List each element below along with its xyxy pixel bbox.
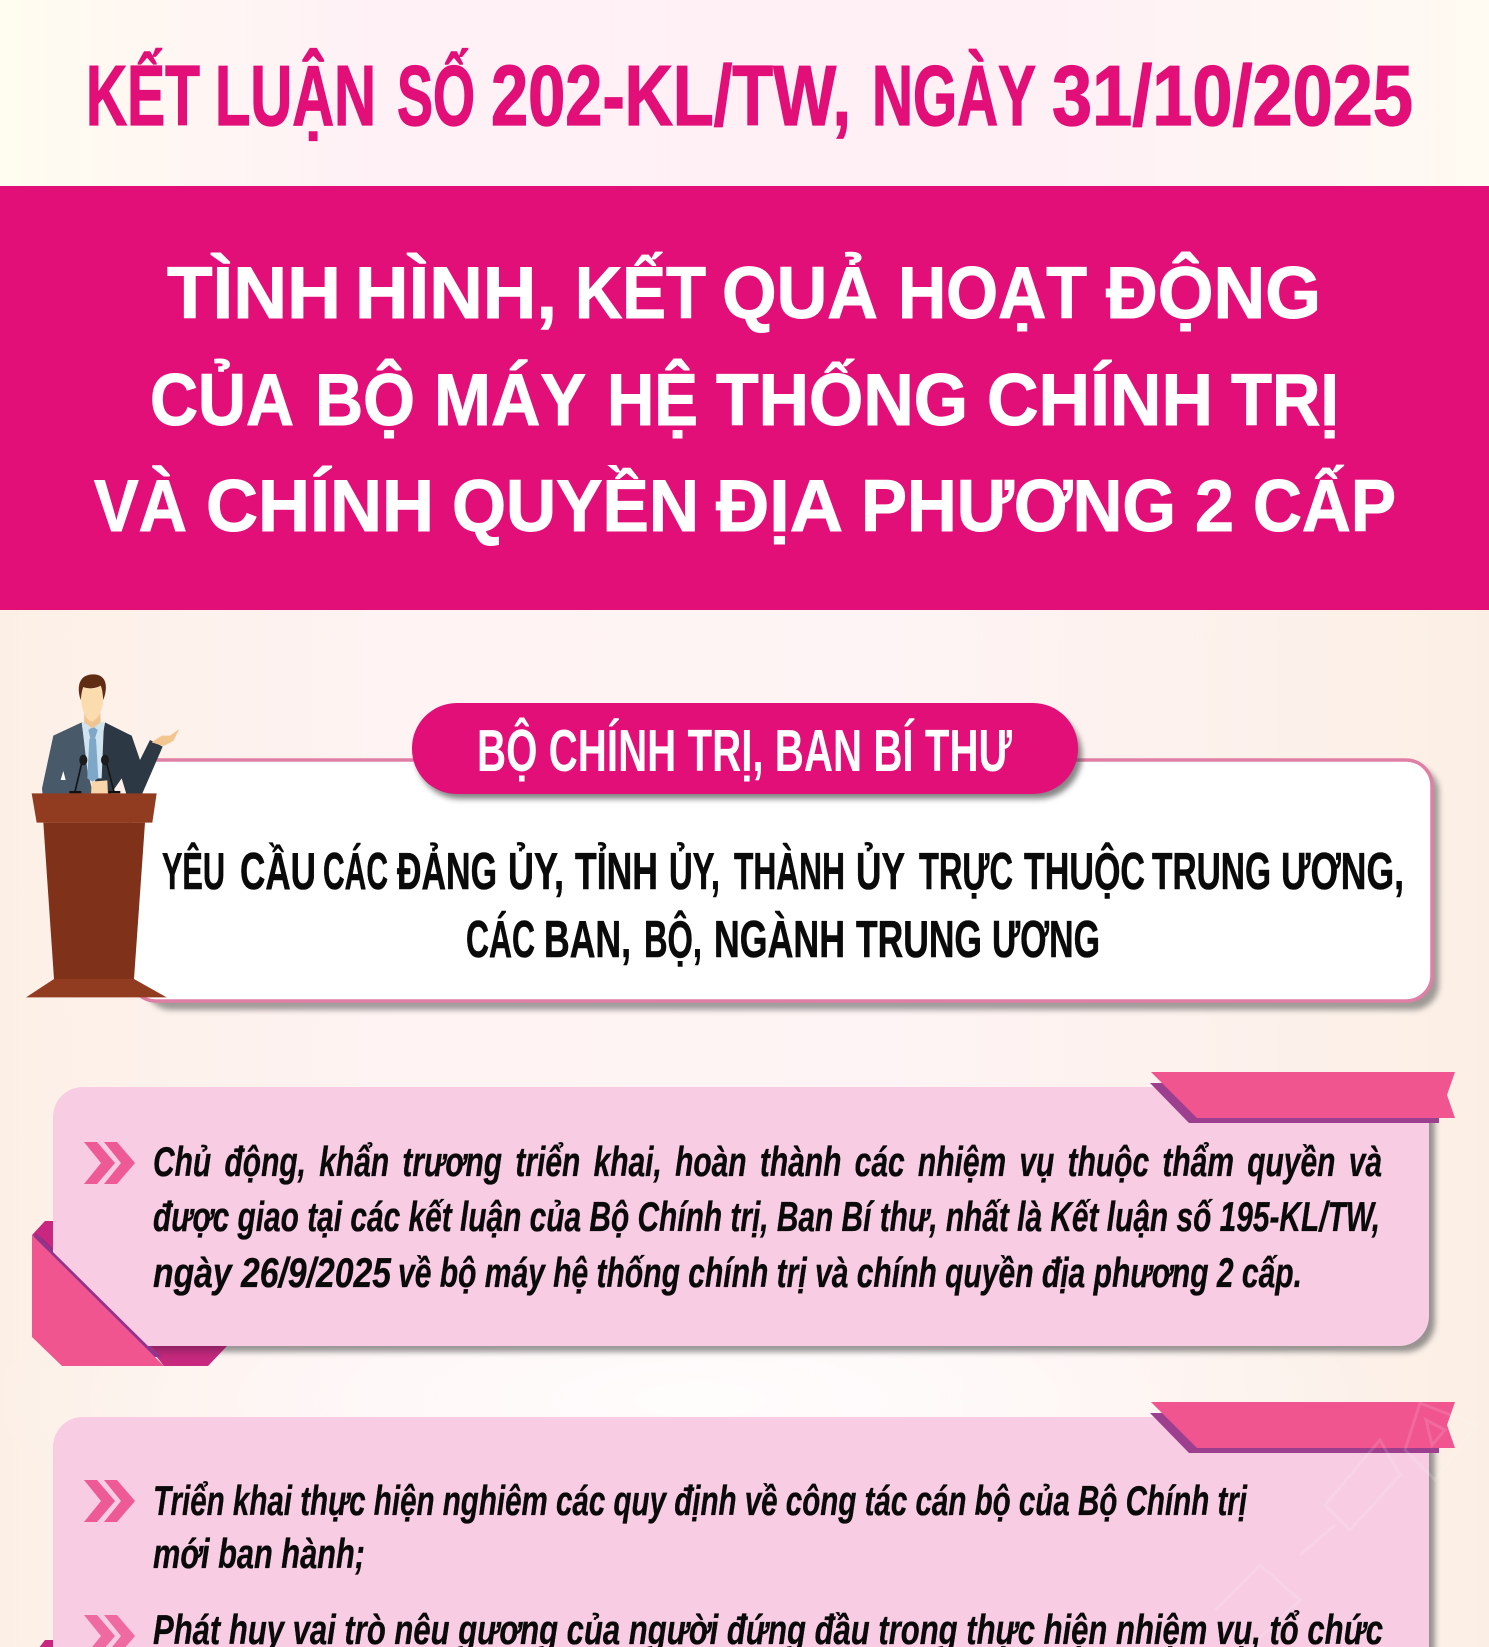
- title: [86, 48, 1413, 144]
- card 2 text: [153, 1477, 1383, 1647]
- banner heading text: HỆ: [607, 360, 698, 441]
- banner heading text: MÁY: [434, 360, 586, 441]
- panel: card 1: [32, 1072, 1455, 1366]
- box text: CẦU: [240, 842, 316, 901]
- title: KẾT: [86, 48, 200, 144]
- title: LUẬN: [215, 48, 376, 144]
- banner heading text: HOẠT: [898, 253, 1087, 334]
- box text: TỈNH: [575, 842, 658, 901]
- banner heading text: VÀ: [94, 466, 187, 547]
- banner heading text: ĐỊA: [716, 466, 843, 547]
- box text: ỦY,: [669, 842, 720, 901]
- card 2 text: mới ban hành;: [153, 1530, 365, 1577]
- box text: CÁC: [466, 911, 535, 969]
- card 1 text: ngày 26/9/2025: [153, 1249, 392, 1296]
- box text: THUỘC: [1024, 842, 1145, 901]
- banner heading text: QUẢ: [722, 253, 878, 334]
- ribbon: right: [1150, 1402, 1455, 1453]
- title: NGÀY: [872, 49, 1036, 144]
- icon: double chevron: [84, 1142, 135, 1184]
- icon: speaker at podium: [26, 674, 179, 997]
- banner heading text: CẤP: [1253, 466, 1396, 547]
- panel: requesting bodies box: [130, 760, 1439, 1010]
- banner heading text: CHÍNH: [206, 466, 434, 547]
- banner heading text: TÌNH: [167, 253, 341, 334]
- banner heading text: [94, 253, 1396, 547]
- box text: BAN,: [544, 911, 631, 969]
- banner heading text: BỘ: [315, 360, 415, 441]
- box text: ƯƠNG: [992, 911, 1100, 969]
- box text: NGÀNH: [714, 911, 845, 969]
- title: SỐ: [397, 48, 475, 144]
- banner heading text: PHƯƠNG: [861, 466, 1176, 547]
- panel: heading banner: [0, 186, 1489, 610]
- title: 31/10/2025: [1052, 49, 1413, 144]
- ribbon: right: [1150, 1072, 1455, 1123]
- ribbon: left fold: [32, 1221, 227, 1366]
- banner heading text: 2: [1195, 466, 1234, 547]
- panel: card 2: [32, 1402, 1476, 1647]
- box text: TRUNG: [856, 911, 982, 969]
- box text: CÁC: [323, 843, 388, 901]
- box text: TRUNG: [1152, 843, 1271, 901]
- box text: BỘ,: [644, 910, 702, 969]
- banner heading text: CỦA: [150, 360, 294, 441]
- box text: THÀNH: [734, 843, 845, 901]
- box text: YÊU: [162, 842, 225, 901]
- box text: ĐẢNG: [397, 842, 497, 901]
- banner heading text: CHÍNH: [987, 360, 1213, 441]
- heading pill: BỘ CHÍNH TRỊ, BAN BÍ THƯ: [477, 717, 1012, 784]
- banner heading text: ĐỘNG: [1106, 253, 1321, 334]
- banner heading text: THỐNG: [716, 359, 968, 441]
- heading pill: [412, 703, 1082, 799]
- box text: ƯƠNG,: [1281, 843, 1404, 901]
- box text: ỦY: [856, 842, 905, 901]
- icon: double chevron: [84, 1615, 135, 1647]
- card 1 text: [153, 1138, 1382, 1296]
- box text: TRỰC: [919, 843, 1013, 901]
- title: 202-KL/TW,: [491, 49, 851, 144]
- banner heading text: TRỊ: [1231, 360, 1339, 441]
- banner heading text: KẾT: [575, 253, 706, 334]
- box text: [162, 842, 1404, 969]
- icon: double chevron: [84, 1480, 135, 1522]
- banner heading text: QUYỀN: [452, 466, 699, 547]
- watermark: [1215, 1403, 1476, 1647]
- box text: ỦY,: [508, 842, 564, 901]
- banner heading text: HÌNH,: [355, 253, 557, 334]
